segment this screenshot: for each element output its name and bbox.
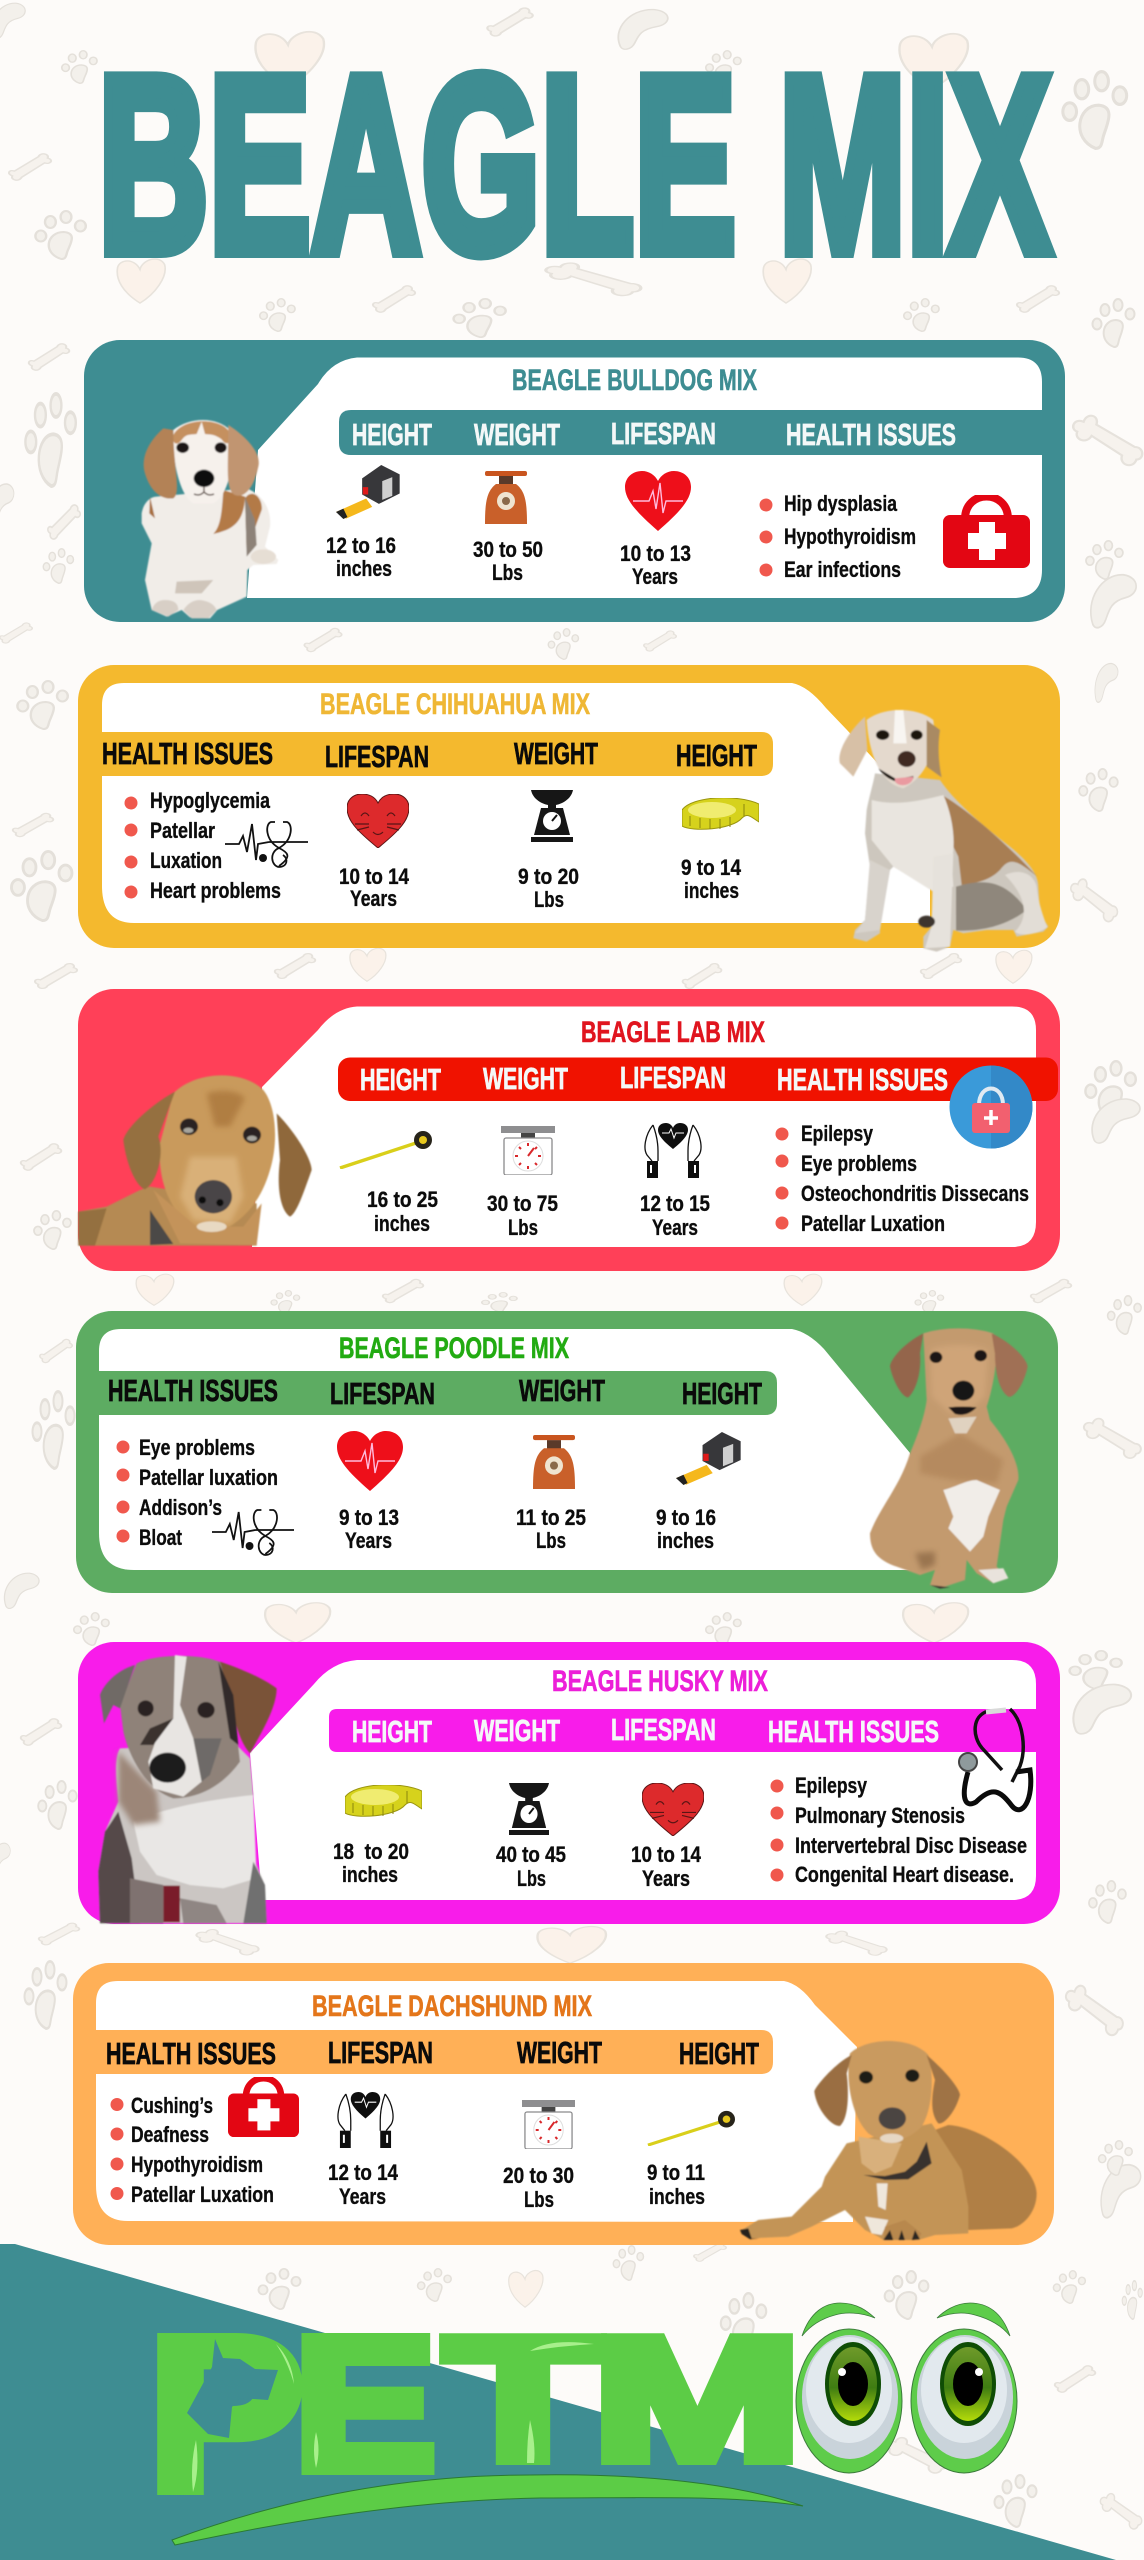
health issues list <box>776 1121 1029 1236</box>
health issues list: Patellar Luxation <box>801 1211 945 1236</box>
height value: 18 to 20 <box>333 1839 409 1864</box>
height value <box>681 855 742 903</box>
dog photo: beagle dachshund <box>740 2041 1037 2240</box>
icon: stethoscope with pulse <box>225 822 308 867</box>
height value <box>326 533 396 581</box>
height value <box>367 1187 438 1236</box>
health issues list <box>116 1435 278 1550</box>
icon: heart <box>337 1431 403 1491</box>
panel: beagle poodle mix <box>76 1311 1058 1593</box>
health issues list: Intervertebral Disc Disease <box>795 1833 1027 1858</box>
height value: inches <box>336 556 392 581</box>
weight value: Lbs <box>536 1528 566 1553</box>
health issues list: Hypoglycemia <box>150 788 271 813</box>
dog photo: beagle husky <box>98 1655 277 1923</box>
logo letters: E <box>294 2299 436 2510</box>
weight value <box>516 1505 586 1553</box>
weight value: Lbs <box>534 887 564 912</box>
heading: BEAGLE HUSKY MIX <box>552 1665 768 1698</box>
weight value <box>503 2163 574 2212</box>
panel: beagle bulldog mix <box>84 340 1065 622</box>
icon: weighing scale <box>485 471 527 524</box>
icon: weighing scale <box>501 1126 555 1175</box>
logo letters: T <box>445 2301 601 2496</box>
header band: HEIGHT <box>352 418 432 452</box>
dog photo: beagle bulldog <box>142 420 278 618</box>
icon: blue first aid badge <box>950 1066 1032 1148</box>
header band: LIFESPAN <box>328 2036 433 2070</box>
header band: HEIGHT <box>679 2037 759 2071</box>
height value: 12 to 16 <box>326 533 396 558</box>
header band: HEALTH ISSUES <box>768 1715 939 1749</box>
health issues list <box>110 2093 274 2207</box>
lifespan value: 9 to 13 <box>339 1505 399 1530</box>
header band <box>96 2030 773 2074</box>
lifespan value: Years <box>632 564 678 589</box>
height value <box>333 1839 409 1887</box>
lifespan value: Years <box>642 1866 690 1891</box>
health issues list: Eye problems <box>139 1435 255 1460</box>
icon: first aid kit <box>943 496 1030 568</box>
icon: tape roll <box>345 1785 422 1816</box>
header band: WEIGHT <box>474 1714 560 1748</box>
header band: HEALTH ISSUES <box>108 1374 278 1408</box>
weight value: 30 to 75 <box>487 1191 558 1216</box>
lifespan value: 10 to 13 <box>620 541 691 566</box>
health issues list: Hypothyroidism <box>131 2152 263 2177</box>
left eye <box>796 2329 902 2473</box>
panel: beagle chihuahua mix <box>78 665 1060 952</box>
weight value <box>487 1191 558 1240</box>
header band <box>329 1709 1036 1752</box>
lifespan value: 10 to 14 <box>339 864 410 889</box>
icon: weighing scale <box>509 1783 549 1835</box>
eyebrows <box>802 2303 1010 2336</box>
weight value <box>473 537 543 585</box>
height value: inches <box>649 2184 705 2209</box>
weight value: Lbs <box>524 2187 554 2212</box>
weight value: 30 to 50 <box>473 537 543 562</box>
lifespan value: Years <box>345 1528 392 1553</box>
logo swoosh <box>172 2475 803 2545</box>
header band: HEIGHT <box>352 1715 432 1749</box>
lifespan value <box>640 1191 710 1240</box>
logo letters: M <box>593 2301 801 2496</box>
health issues list: Patellar luxation <box>139 1465 278 1490</box>
lifespan value <box>631 1842 702 1891</box>
panel: beagle dachshund mix <box>73 1963 1054 2245</box>
weight value: 11 to 25 <box>516 1505 586 1530</box>
header band: WEIGHT <box>474 418 560 452</box>
height value: inches <box>374 1211 430 1236</box>
weight value <box>518 864 579 912</box>
health issues list: Pulmonary Stenosis <box>795 1803 965 1828</box>
header band: HEALTH ISSUES <box>786 418 956 452</box>
dog photo: beagle poodle <box>870 1328 1028 1589</box>
lifespan value: 10 to 14 <box>631 1842 702 1867</box>
health issues list <box>124 788 281 903</box>
icon: heart <box>625 471 691 531</box>
health issues list: Patellar Luxation <box>131 2182 274 2207</box>
health issues list: Congenital Heart disease. <box>795 1862 1014 1887</box>
lifespan value: Years <box>652 1215 698 1240</box>
header band: HEALTH ISSUES <box>777 1063 948 1097</box>
heading: BEAGLE DACHSHUND MIX <box>312 1990 592 2023</box>
lifespan value: 12 to 15 <box>640 1191 710 1216</box>
health issues list: Luxation <box>150 848 222 873</box>
icon: tape roll <box>682 798 759 829</box>
dog silhouette in P <box>187 2339 278 2438</box>
icon: tape measure <box>676 1432 741 1485</box>
logo letters: P <box>148 2293 304 2536</box>
health issues list <box>760 491 916 582</box>
health issues list: Deafness <box>131 2122 209 2147</box>
weight value: 40 to 45 <box>496 1842 566 1867</box>
height value: 9 to 14 <box>681 855 742 880</box>
lifespan value <box>328 2160 399 2209</box>
header band: LIFESPAN <box>611 417 716 451</box>
icon: stethoscope <box>959 1709 1031 1810</box>
header band: WEIGHT <box>517 2036 602 2070</box>
icon: heart <box>347 794 409 848</box>
health issues list: Ear infections <box>784 557 901 582</box>
header band <box>99 1371 777 1415</box>
weight value: 20 to 30 <box>503 2163 574 2188</box>
header band: LIFESPAN <box>325 740 429 774</box>
header band: LIFESPAN <box>611 1713 716 1747</box>
weight value <box>496 1842 566 1891</box>
health issues list: Osteochondritis Dissecans <box>801 1181 1029 1206</box>
lifespan value <box>339 864 410 911</box>
weight value: Lbs <box>508 1215 538 1240</box>
header band <box>338 1058 1058 1101</box>
right eye <box>911 2329 1017 2473</box>
lifespan value <box>339 1505 399 1553</box>
header band: WEIGHT <box>519 1374 605 1408</box>
icon: hands holding heart <box>338 2092 393 2148</box>
header band: WEIGHT <box>514 737 598 771</box>
health issues list: Eye problems <box>801 1151 917 1176</box>
weight value: Lbs <box>517 1866 546 1891</box>
icon: first aid kit <box>228 2078 299 2137</box>
logo: PETMOO <box>148 2293 1017 2545</box>
dog photo: beagle lab <box>78 1075 312 1246</box>
panel: beagle husky mix <box>78 1642 1060 1924</box>
height value: 9 to 11 <box>647 2160 705 2185</box>
health issues list: Cushing’s <box>131 2093 213 2118</box>
header band: HEIGHT <box>360 1063 441 1097</box>
health issues list: Epilepsy <box>795 1773 868 1798</box>
icon: weighing scale <box>531 790 573 842</box>
header band <box>102 732 773 776</box>
dog photo: beagle chihuahua <box>839 710 1048 952</box>
lifespan value: 12 to 14 <box>328 2160 399 2185</box>
lifespan value: Years <box>339 2184 386 2209</box>
lifespan value: Years <box>350 886 397 911</box>
health issues list <box>770 1773 1027 1887</box>
height value: 9 to 16 <box>656 1505 716 1530</box>
header band <box>339 410 1042 455</box>
lifespan value <box>620 541 691 589</box>
footer teal wedge <box>0 2244 1116 2560</box>
heading: BEAGLE POODLE MIX <box>339 1332 569 1365</box>
height value: inches <box>342 1862 398 1887</box>
height value <box>656 1505 716 1553</box>
panel: beagle lab mix <box>78 989 1060 1271</box>
health issues list: Hip dysplasia <box>784 491 898 516</box>
icon: stethoscope with pulse <box>212 1510 294 1555</box>
header band: HEIGHT <box>682 1377 762 1411</box>
header band: WEIGHT <box>483 1062 568 1096</box>
header band: HEALTH ISSUES <box>102 737 273 771</box>
health issues list: Epilepsy <box>801 1121 874 1146</box>
logo letters <box>148 2293 801 2536</box>
icon: tape measure <box>648 2111 735 2145</box>
header band: LIFESPAN <box>620 1061 726 1095</box>
height value: inches <box>684 878 739 903</box>
icon: tape measure <box>340 1131 432 1168</box>
logo gloss highlights <box>192 2342 594 2492</box>
height value: 16 to 25 <box>367 1187 438 1212</box>
weight value: 9 to 20 <box>518 864 579 889</box>
height value: inches <box>657 1528 714 1553</box>
icon: heart <box>642 1783 704 1836</box>
icon: weighing scale <box>522 2100 575 2149</box>
icon: hands holding heart <box>645 1123 701 1178</box>
health issues list: Heart problems <box>150 878 281 903</box>
health issues list: Hypothyroidism <box>784 524 916 549</box>
weight value: Lbs <box>492 560 523 585</box>
height value <box>647 2160 705 2209</box>
heading: BEAGLE LAB MIX <box>581 1016 765 1049</box>
health issues list: Addison’s <box>139 1495 222 1520</box>
heading: BEAGLE CHIHUAHUA MIX <box>320 688 590 721</box>
header band: LIFESPAN <box>330 1377 435 1411</box>
health issues list: Patellar <box>150 818 215 843</box>
header band: HEALTH ISSUES <box>106 2037 276 2071</box>
heading: BEAGLE BULLDOG MIX <box>512 364 757 397</box>
header band: HEIGHT <box>676 739 757 773</box>
icon: weighing scale <box>533 1435 575 1489</box>
health issues list: Bloat <box>139 1525 183 1550</box>
icon: tape measure <box>336 465 400 519</box>
